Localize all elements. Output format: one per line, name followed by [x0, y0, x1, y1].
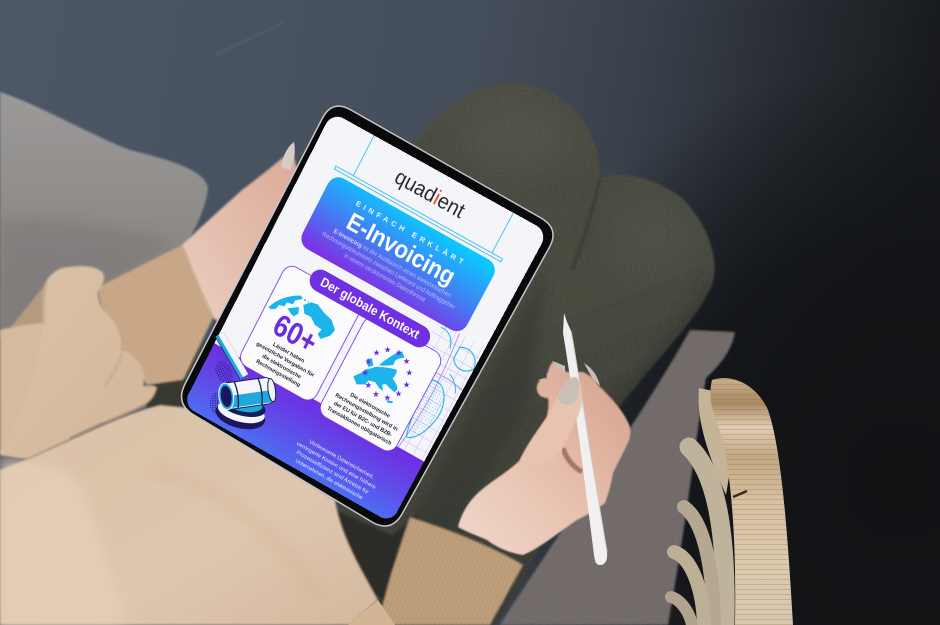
card text: Rechnungsstellung wird in	[341, 401, 407, 442]
card text: der EU für B2C- und B2B-	[340, 410, 400, 447]
icon: EU map with stars: ★	[364, 380, 372, 390]
olive trousers	[150, 80, 720, 625]
bottom text: verringerte Kosten und eine höhere	[304, 453, 386, 503]
finger nails	[538, 361, 600, 386]
tablet screen	[187, 116, 544, 518]
lower arm	[0, 322, 70, 458]
icon: EU map with stars: ★	[403, 356, 411, 366]
right hand with pencil	[458, 313, 630, 565]
icon: EU map with stars: ★	[373, 347, 381, 357]
icon: globe	[268, 296, 335, 339]
banner description: in einem strukturierten Datenformat	[346, 256, 429, 306]
gavel head	[217, 376, 277, 411]
gavel shadow	[210, 358, 236, 414]
bottom text: Unternehmen, die elektronische	[303, 472, 373, 515]
icon: EU map with stars: ★	[383, 392, 391, 402]
pale lap fold	[0, 457, 125, 625]
grey cushion on the right	[500, 328, 740, 625]
icon: gavel	[210, 333, 277, 434]
gavel handle	[219, 333, 246, 377]
big number: 60+	[273, 313, 328, 368]
pencil	[563, 313, 607, 565]
icon: EU map with stars: ★	[395, 388, 403, 398]
sweater lap	[0, 405, 378, 625]
background world map	[398, 326, 483, 460]
icon: EU map with stars: ★	[364, 357, 372, 367]
quadient logo: quadient	[391, 164, 468, 223]
lower gradient panel	[187, 343, 424, 518]
icon: EU map with stars: ★	[372, 389, 380, 399]
banner kicker: EINFACH ERKLÄRT	[356, 200, 466, 267]
bottom text: Verbesserte Datensicherheit,	[316, 451, 384, 493]
tablet body	[182, 106, 553, 526]
icon: EU map with stars	[353, 344, 413, 403]
dark gap below cuff	[145, 378, 190, 410]
card text: die elektronische	[267, 362, 309, 389]
bottom text: Prozesseffizienz sind Anreize für	[304, 463, 379, 509]
icon: EU map with stars: ★	[403, 379, 411, 389]
thumb	[520, 378, 582, 464]
card text: gesetzliche Vorgaben für	[261, 349, 322, 388]
icon: EU map with stars: ★	[361, 368, 369, 378]
icon: EU map with stars: ★	[405, 368, 413, 378]
rattan chair arm	[671, 378, 793, 625]
blue title banner	[297, 173, 499, 336]
banner title: E-Invoicing	[345, 209, 461, 292]
hanging rail	[334, 135, 514, 262]
card text	[328, 392, 398, 445]
card: 60+ countries	[240, 266, 359, 400]
hand back and fingers	[458, 362, 630, 555]
ribbed left cuff	[98, 245, 213, 385]
left hand behind tablet	[182, 142, 298, 325]
icon: EU map with stars: ★	[395, 347, 403, 357]
left thumb nail	[281, 142, 295, 170]
thumb nail	[558, 377, 579, 405]
puffy sleeve	[0, 266, 157, 458]
ribbed right cuff	[378, 517, 523, 625]
card text: Die elektronische	[356, 400, 398, 428]
card text: Rechnungsstellung	[261, 368, 308, 398]
card text: Länder haben	[278, 349, 312, 373]
card: EU obligation	[320, 319, 442, 451]
pill heading: Der globale Kontext	[323, 278, 427, 346]
icon: EU map with stars: ★	[384, 344, 392, 354]
shadow behind sleeve	[10, 282, 80, 345]
banner description: Rechnungsdokuments zwischen Lieferant und Auftraggeber	[324, 234, 458, 313]
gavel base	[213, 387, 270, 434]
grey rug on the left	[0, 90, 210, 345]
card text: Transaktionen obligatorisch	[333, 415, 401, 457]
banner description: E-Invoicing ist der Austausch eines elektronischen	[335, 231, 454, 301]
beige sweater	[0, 245, 523, 625]
